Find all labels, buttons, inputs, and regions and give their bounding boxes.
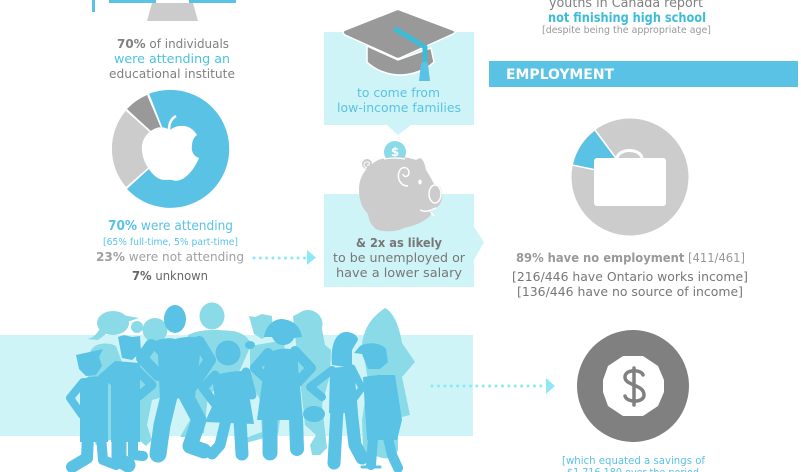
text: not finishing high school: not finishing high school — [548, 11, 706, 26]
heading: employment — [489, 61, 798, 87]
front row figures — [70, 305, 402, 468]
chart: attendance donut with apple — [112, 90, 229, 208]
text: not finishing high school: [despite being the appropriate age] — [542, 25, 711, 36]
heading: employment: EMPLOYMENT — [506, 67, 614, 83]
girl long hair — [332, 332, 358, 368]
back row figures — [87, 302, 415, 459]
text: donut legend: 7% unknown — [132, 268, 208, 283]
text: employment stats: [136/446 have no source of income] — [517, 284, 743, 299]
text: to come from low-income families: to come from — [357, 85, 440, 100]
text: 70% of individuals: 70% of individuals — [117, 37, 229, 51]
chart: employment pie with briefcase — [572, 118, 688, 236]
text: employment stats — [512, 250, 748, 299]
text: 70% of individuals: educational institute — [109, 67, 235, 81]
girl with ponytail — [216, 340, 240, 366]
text: 70% of individuals: were attending an — [114, 52, 230, 66]
icon: piggy bank: $ — [391, 145, 399, 159]
text: 2x as likely — [333, 235, 466, 280]
icon: apple — [142, 116, 199, 181]
text: 2x as likely: have a lower salary — [336, 265, 463, 280]
text: savings note — [562, 454, 706, 472]
text: employment stats: [216/446 have Ontario works income] — [512, 269, 748, 284]
text: donut legend: 70% were attending — [108, 219, 233, 234]
boy with cap — [354, 343, 388, 369]
text: donut legend: 23% were not attending — [96, 249, 244, 264]
panel: 2x as likely callout — [324, 141, 484, 287]
icon: piggy bank — [359, 141, 442, 231]
text: donut legend — [96, 219, 244, 283]
panel: low-income callout — [324, 10, 474, 135]
boy 2 — [118, 335, 141, 360]
panel: top-left monitor base icon — [92, 0, 236, 21]
woman in dress — [264, 319, 302, 345]
arrow: dotted arrow to savings coin — [432, 378, 555, 394]
text: employment stats: 89% have no employment [411/461] — [516, 250, 745, 265]
text: to come from low-income families — [337, 85, 461, 115]
text: 2x as likely: & 2x as likely — [356, 235, 442, 250]
text: to come from low-income families: low-income families — [337, 100, 461, 115]
text: not finishing high school — [542, 0, 711, 36]
icon: dollar coin — [577, 330, 689, 442]
centre man — [164, 305, 186, 333]
text: 2x as likely: to be unemployed or — [333, 250, 466, 265]
panel: band behind people — [0, 335, 473, 436]
boy 1 — [76, 349, 103, 376]
icon: briefcase — [594, 150, 666, 206]
illustration: group of youths — [70, 302, 415, 468]
text: donut legend: [65% full-time, 5% part-time] — [103, 237, 238, 248]
text: savings note: [which equated a savings of — [562, 454, 706, 467]
arrow: dotted arrow to middle column — [254, 250, 316, 265]
text: 70% of individuals — [109, 37, 235, 81]
icon: graduation cap — [343, 10, 455, 81]
